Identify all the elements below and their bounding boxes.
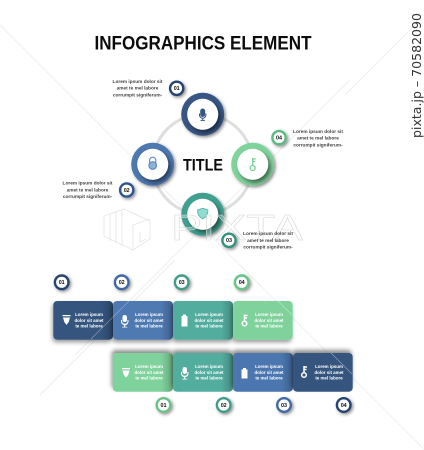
card 1	[53, 301, 113, 340]
card 2: dolor sit amet	[194, 370, 224, 375]
callout 04: Lorem ipsum dolor sit	[293, 129, 343, 135]
card 1: Lorem ipsum	[135, 364, 163, 369]
card 4	[233, 301, 293, 340]
top row number badges: 03	[179, 280, 185, 286]
top row number badges: 02	[119, 280, 125, 286]
card 1: dolor sit amet	[134, 370, 164, 375]
watermark: pixta logo and wordmark: PIXTA	[171, 207, 303, 248]
callout 04	[271, 129, 343, 148]
card 1	[113, 353, 173, 392]
callout 02: 02	[124, 188, 130, 194]
callout 03	[221, 231, 293, 251]
callout 02: Lorem ipsum dolor sit	[63, 180, 113, 186]
bottom row number badges: 03	[281, 403, 287, 409]
icon: pen nib	[62, 315, 70, 325]
card 4: te mel labore	[255, 324, 283, 328]
bottom row number badges: 01	[160, 403, 166, 409]
card 3: Lorem ipsum	[255, 364, 283, 369]
card 3: dolor sit amet	[254, 370, 284, 375]
icon: microphone	[121, 315, 128, 328]
card 1: te mel labore	[75, 324, 103, 328]
icon: key	[242, 314, 248, 326]
icon: pen nib	[122, 368, 130, 378]
node: top microphone	[181, 93, 224, 136]
callout 04: corrumpit signiferum-	[293, 142, 343, 148]
callout 01: Lorem ipsum dolor sit	[113, 79, 163, 85]
callout 03: 03	[226, 238, 232, 244]
watermark: pixta logo and wordmark	[104, 207, 303, 250]
bottom row number badges	[156, 397, 352, 413]
card 2: te mel labore	[135, 324, 163, 328]
card 1: te mel labore	[135, 376, 163, 380]
callout 01: corrumpit signiferum-	[113, 92, 163, 98]
card 2: Lorem ipsum	[195, 364, 223, 369]
card 3: te mel labore	[195, 324, 223, 328]
callout 04: amet te mel labore	[297, 136, 339, 142]
card 1: dolor sit amet	[74, 318, 104, 323]
icon: microphone	[200, 109, 206, 120]
top row number badges: 04	[239, 280, 245, 286]
bottom row number badges: 02	[221, 403, 227, 409]
panel: top process row	[53, 301, 293, 340]
node: left lock	[131, 143, 174, 186]
card 2: te mel labore	[195, 376, 223, 380]
card 4: Lorem ipsum	[255, 312, 283, 317]
ring	[153, 114, 253, 214]
card 4: Lorem ipsum	[315, 364, 343, 369]
card 2: Lorem ipsum	[135, 312, 163, 317]
callout 03: Lorem ipsum dolor sit	[243, 231, 293, 237]
icon: padlock	[149, 157, 156, 169]
callout 01	[113, 79, 184, 98]
title: INFOGRAPHICS ELEMENT	[94, 32, 312, 54]
callout 01: amet te mel labore	[117, 86, 159, 92]
card 3	[233, 353, 293, 392]
card 2	[113, 301, 173, 340]
card 4: dolor sit amet	[254, 318, 284, 323]
icon: battery	[242, 368, 248, 378]
card 3: dolor sit amet	[194, 318, 224, 323]
card 3: te mel labore	[255, 376, 283, 380]
callout 01: 01	[174, 86, 180, 92]
icon: microphone	[181, 367, 188, 380]
top row number badges	[54, 274, 250, 290]
card 2	[173, 353, 233, 392]
callout 02	[63, 180, 134, 200]
card 2: dolor sit amet	[134, 318, 164, 323]
icon: battery	[182, 314, 188, 326]
callout 03: corrumpit signiferum-	[243, 245, 293, 251]
center title: TITLE	[183, 156, 223, 174]
watermark lines crossing the cards	[91, 300, 352, 374]
card 4: te mel labore	[315, 376, 343, 380]
callout 02: corrumpit signiferum-	[63, 194, 113, 200]
panel: bottom process row	[113, 353, 353, 392]
node: bottom shield	[181, 193, 224, 236]
panel: circular diagram	[131, 93, 274, 236]
icon: shield	[197, 208, 208, 219]
top row number badges: 01	[59, 280, 65, 286]
card 4: dolor sit amet	[314, 370, 344, 375]
card 4	[293, 353, 353, 392]
callout 04: 04	[276, 136, 282, 142]
callout 03: amet te mel labore	[247, 238, 289, 244]
icon: key	[302, 366, 307, 377]
bottom row number badges: 04	[341, 403, 347, 409]
icon: key	[250, 158, 256, 170]
node: right key	[231, 143, 274, 186]
card 1: Lorem ipsum	[75, 312, 103, 317]
card 3	[173, 301, 233, 340]
callout 02: amet te mel labore	[67, 187, 109, 193]
card 3: Lorem ipsum	[195, 312, 223, 317]
watermark: side credit text: pixta.jp – 70582090	[410, 13, 424, 138]
